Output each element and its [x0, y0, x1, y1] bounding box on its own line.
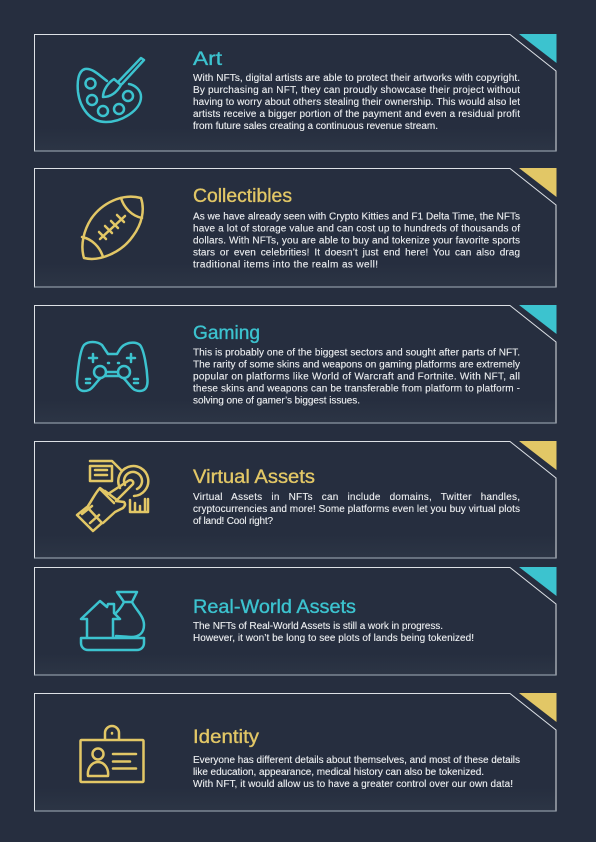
corner triangle: Real-World Assets — [519, 567, 556, 596]
corner triangle: Virtual Assets — [519, 441, 556, 470]
title: Gaming: Gaming — [193, 323, 260, 344]
text: Virtual Assets: cryptocurrencies and more! Some platforms even let you buy virtual plots — [193, 504, 520, 515]
text: Collectibles: have a lot of storage value and can cost up to hundreds of thousands of — [193, 224, 520, 234]
text: Identity — [193, 755, 520, 790]
panel: Collectibles — [34, 168, 556, 287]
title: Real-World Assets: Real-World Assets — [193, 597, 356, 618]
text: Gaming: popular on platforms like World of Warcraft and Fortnite. With NFT, all — [193, 372, 520, 382]
icon: football — [82, 197, 143, 259]
text: Collectibles: stars or even celebrities! It doesn’t just end here! You can also drag — [193, 248, 520, 258]
title: Identity: Identity — [193, 727, 260, 748]
text: Identity: Everyone has different details about themselves, and most of these details — [193, 755, 520, 766]
corner triangle: Identity — [519, 693, 556, 722]
text: Virtual Assets — [193, 492, 520, 527]
text: Collectibles: As we have already seen with Crypto Kitties and F1 Delta Time, the NFTs — [193, 212, 520, 222]
panel: Virtual Assets — [34, 441, 556, 558]
text: Virtual Assets: Virtual Assets in NFTs can include domains, Twitter handles, — [193, 492, 520, 503]
icon: game controller — [77, 342, 148, 391]
text: Gaming: these skins and weapons can be transferable from platform to platform - — [193, 384, 520, 394]
icon: hand tapping button — [77, 461, 148, 531]
text: Collectibles: dollars. With NFTs, you are able to buy and tokenize your favorite sports — [193, 236, 520, 246]
title: Art: Art — [193, 49, 223, 70]
icon: ID badge — [80, 726, 144, 782]
text: Gaming — [193, 348, 520, 406]
icon: house and money bag — [81, 592, 144, 650]
text: Art — [193, 73, 520, 132]
corner triangle: Gaming — [519, 305, 556, 334]
text: Identity: like education, appearance, medical history can also be tokenized. — [193, 767, 484, 778]
text: Art: having to worry about others stealing their ownership. This would also let — [193, 97, 520, 108]
text: Real-World Assets: However, it won’t be long to see plots of lands being tokenized! — [193, 633, 474, 644]
corner triangle: Collectibles — [519, 168, 556, 197]
panel: Identity — [34, 693, 556, 811]
text: Collectibles: traditional items into the realm as well! — [193, 260, 378, 270]
title: Collectibles: Collectibles — [193, 186, 292, 207]
panel: Gaming — [34, 305, 556, 423]
panel: Art — [34, 34, 556, 151]
corner triangle: Art — [519, 34, 556, 63]
text: Real-World Assets — [193, 621, 474, 644]
icon: palette and brush — [78, 58, 144, 122]
text: Art: artists receive a bigger portion of the payment and even a residual profit — [193, 109, 520, 120]
text: Virtual Assets: of land! Cool right? — [193, 516, 273, 527]
text: Real-World Assets: The NFTs of Real-World Assets is still a work in progress. — [193, 621, 443, 632]
text: Gaming: The rarity of some skins and weapons on gaming platforms are extremely — [193, 360, 520, 370]
text: Collectibles — [193, 212, 520, 270]
text: Art: from future sales creating a continuous revenue stream. — [193, 121, 438, 132]
text: Identity: With NFT, it would allow us to have a greater control over our own data! — [193, 779, 513, 790]
text: Art: With NFTs, digital artists are able to protect their artworks with copyright. — [193, 73, 520, 84]
text: Art: By purchasing an NFT, they can proudly showcase their project without — [193, 85, 520, 96]
text: Gaming: solving one of gamer’s biggest issues. — [193, 396, 360, 406]
panel: Real-World Assets — [34, 567, 556, 675]
text: Gaming: This is probably one of the biggest sectors and sought after parts of NFT. — [193, 348, 520, 358]
title: Virtual Assets: Virtual Assets — [193, 467, 315, 488]
